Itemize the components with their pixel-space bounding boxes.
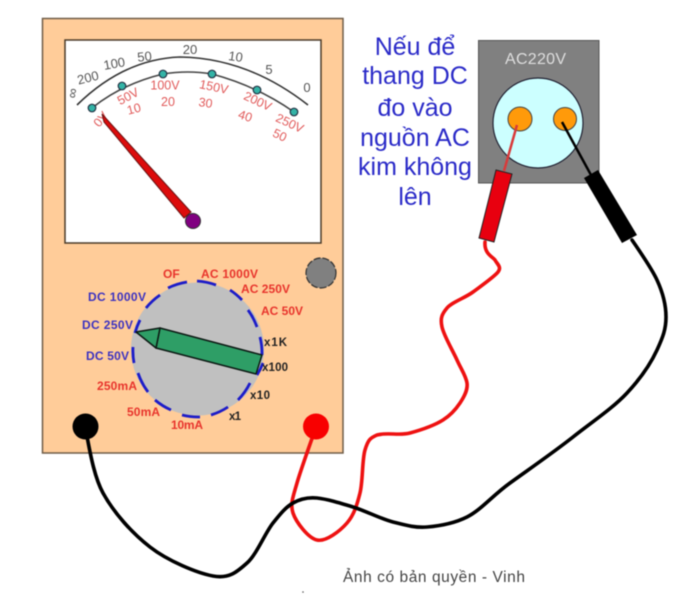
- dial labels: AC and current: AC 50V: [261, 304, 303, 318]
- callout text: kim không: [358, 153, 472, 181]
- dial labels: AC and current: AC 1000V: [201, 267, 258, 281]
- dial labels: AC and current: AC 250V: [241, 282, 290, 296]
- voltage scale labels: 150V: [198, 77, 230, 97]
- callout text: nguồn AC: [360, 124, 470, 152]
- voltage scale labels: 40: [236, 107, 254, 125]
- ohm scale labels: 10: [227, 48, 244, 65]
- dial labels: DC: DC 50V: [86, 349, 129, 363]
- callout text: Nếu để: [375, 33, 455, 61]
- voltage scale labels: 0V: [91, 109, 112, 130]
- dial labels: ohm: x1K: [264, 337, 288, 349]
- panel: multimeter body: [42, 18, 343, 453]
- voltage scale labels: 50V: [115, 85, 142, 108]
- red test lead wire: [292, 242, 500, 540]
- dial labels: ohm: [229, 337, 288, 423]
- black terminal: [72, 414, 98, 440]
- ohm scale labels: 0: [303, 80, 311, 95]
- speck: [302, 591, 304, 593]
- range selector dial: [131, 281, 264, 417]
- panel: meter screen: [63, 40, 321, 243]
- ohm scale labels: 50: [137, 48, 153, 65]
- ohm scale labels: [63, 42, 311, 99]
- dial labels: AC and current: 50mA: [127, 405, 160, 419]
- dial labels: ohm: x1: [229, 411, 242, 423]
- voltage scale labels: 10: [125, 101, 143, 118]
- needle hub: [186, 214, 200, 228]
- scale arc: inner: [92, 72, 294, 112]
- scale tick dots: [88, 70, 298, 116]
- black test lead wire: [85, 240, 666, 577]
- voltage scale labels: [91, 77, 306, 145]
- dial labels: ohm: x10: [250, 390, 270, 402]
- dial labels: DC: DC 250V: [82, 318, 133, 332]
- dial labels: AC and current: OF: [163, 267, 180, 281]
- dial labels: AC and current: 10mA: [171, 418, 203, 432]
- scale arc: outer: [77, 57, 308, 105]
- ohm scale labels: 200: [76, 68, 100, 88]
- red terminal: [303, 414, 329, 440]
- callout text: đo vào: [377, 94, 453, 122]
- ohm scale labels: 20: [183, 42, 197, 57]
- voltage scale labels: 200V: [241, 89, 274, 114]
- zero adjust knob: [306, 258, 336, 288]
- outlet face: [493, 78, 583, 168]
- outlet label: AC220V: [505, 51, 566, 68]
- voltage scale labels: 250V: [273, 111, 306, 136]
- ohm scale labels: ∞: [63, 87, 81, 99]
- voltage scale labels: 100V: [150, 78, 180, 92]
- needle: [102, 114, 191, 218]
- copyright caption: Ảnh có bản quyền - Vinh: [343, 569, 525, 586]
- black probe: [562, 122, 637, 243]
- voltage scale labels: 20: [161, 95, 175, 109]
- voltage scale labels: 30: [198, 95, 213, 111]
- dial labels: ohm: x100: [262, 362, 288, 374]
- socket holes: [508, 107, 532, 131]
- dial labels: AC and current: [97, 267, 303, 432]
- callout text: thang DC: [362, 62, 468, 90]
- outlet: [478, 40, 599, 183]
- voltage scale labels: 50: [270, 126, 289, 145]
- dial labels: DC: [82, 290, 146, 363]
- dial labels: AC and current: 250mA: [97, 379, 137, 393]
- dial labels: DC: DC 1000V: [88, 290, 146, 304]
- red probe: [479, 125, 517, 242]
- callout text: lên: [398, 183, 432, 211]
- callout text: [358, 33, 472, 211]
- selector pointer: [136, 328, 262, 374]
- ohm scale labels: 5: [265, 62, 273, 77]
- ohm scale labels: 100: [102, 54, 126, 73]
